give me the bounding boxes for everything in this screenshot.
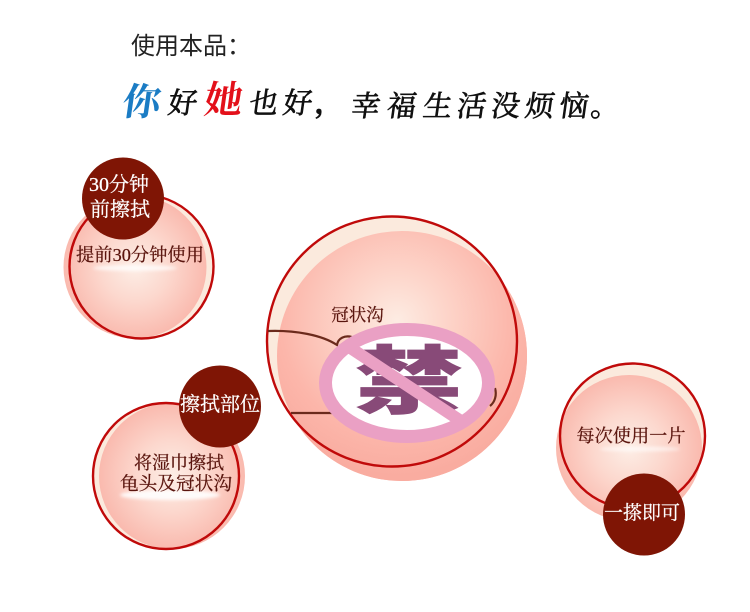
headline slogan: 恼: [557, 83, 592, 125]
headline slogan: 幸: [349, 83, 384, 125]
panel: top-left bubble, 30 minutes before: [64, 158, 214, 338]
badge: wiping area: 擦拭部位: [180, 393, 260, 416]
badge: just one wipe: 一搽即可: [604, 502, 680, 524]
headline slogan: 。: [590, 84, 619, 125]
heading: using this product: 使用本品：: [131, 33, 251, 60]
prohibition sign: 禁: [355, 322, 463, 428]
diagram lines: coronal sulcus outline: [268, 331, 496, 413]
badge: wiping area: [179, 366, 261, 448]
prohibition sign: [326, 322, 488, 436]
headline slogan: 你: [119, 71, 168, 126]
panel: bottom-left bubble, wiping area: [93, 366, 261, 549]
panel: right bubble, one wipe per use: 每次使用一片: [576, 426, 686, 446]
headline slogan: 好: [281, 80, 316, 122]
panel: bottom-left bubble, wiping area: 龟头及冠状沟: [120, 474, 232, 495]
headline slogan: [119, 69, 619, 126]
headline slogan: 好: [166, 80, 201, 122]
headline slogan: 福: [385, 83, 420, 125]
headline slogan: 也: [247, 80, 282, 122]
headline slogan: ,: [314, 81, 324, 122]
headline slogan: 没: [489, 83, 524, 125]
badge: just one wipe: [603, 474, 685, 556]
headline slogan: 活: [455, 83, 490, 125]
headline slogan: 烦: [523, 83, 558, 125]
headline slogan: 她: [201, 69, 247, 124]
headline slogan: 生: [421, 83, 456, 125]
badge: 30 minutes before wiping: [82, 158, 164, 240]
badge: 30 minutes before wiping: 前擦拭: [90, 198, 150, 221]
badge: 30 minutes before wiping: 30分钟: [89, 173, 149, 196]
panel: central bubble with prohibition sign: [267, 216, 527, 481]
panel: top-left bubble, 30 minutes before: 提前30分钟使用: [76, 245, 204, 265]
label: coronal sulcus: 冠状沟: [331, 305, 384, 325]
panel: bottom-left bubble, wiping area: 将湿巾擦拭: [134, 453, 224, 473]
panel: right bubble, one wipe per use: [556, 364, 705, 556]
